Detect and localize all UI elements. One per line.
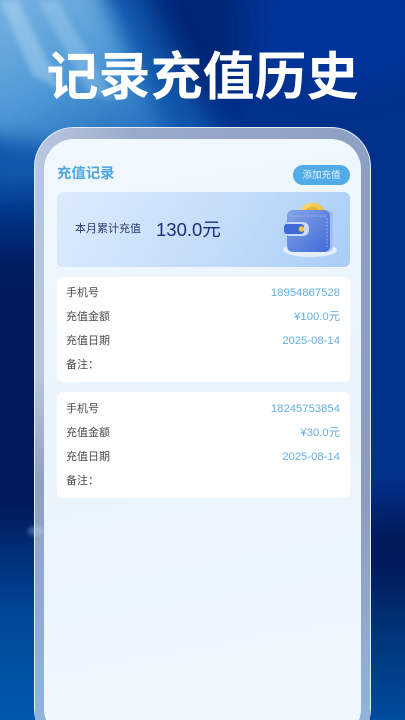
- app header title: 充值记录: [57, 166, 115, 182]
- record 1 date row: 充值日期: [66, 335, 110, 347]
- record card 1: [57, 277, 350, 382]
- record 2 amount row: 充值金额: [66, 427, 110, 439]
- record 1 amount row: ¥100.0元: [294, 311, 340, 323]
- record 2 amount row: [66, 426, 340, 439]
- record 1 date row: 2025-08-14: [282, 335, 340, 347]
- record 1 amount row: 充值金额: [66, 311, 110, 323]
- record card 2: [57, 392, 350, 498]
- record 1 date row: [66, 334, 340, 347]
- record 2 date row: 2025-08-14: [282, 451, 340, 463]
- record 2 amount row: ¥30.0元: [300, 427, 340, 439]
- record 2 date row: 充值日期: [66, 451, 110, 463]
- title: 记录充值历史: [46, 49, 358, 107]
- record 1 phone row: 手机号: [66, 287, 99, 299]
- record 2 phone row: [66, 402, 340, 415]
- icon: wallet with coin: [283, 202, 337, 257]
- panel: monthly summary: [57, 192, 350, 267]
- monthly label: 本月累计充值: [75, 223, 141, 235]
- record 2 note row: 备注：: [66, 475, 99, 487]
- add recharge button: 添加充值: [302, 170, 340, 181]
- phone bottom rim tint: [35, 377, 370, 720]
- record 2 date row: [66, 450, 340, 463]
- phone glass rim: [34, 127, 371, 720]
- record 1 amount row: [66, 310, 340, 323]
- record 1 note row: 备注：: [66, 359, 99, 371]
- add recharge button: [293, 165, 350, 185]
- phone screen: [44, 139, 361, 720]
- phone frame: [34, 127, 371, 720]
- record 2 phone row: 手机号: [66, 403, 99, 415]
- record 2 phone row: 18245753854: [271, 403, 340, 415]
- monthly amount: 130.0元: [156, 219, 221, 240]
- record 1 phone row: [66, 286, 340, 299]
- light streak on frame: [28, 526, 44, 536]
- record 1 phone row: 18954867528: [271, 287, 340, 299]
